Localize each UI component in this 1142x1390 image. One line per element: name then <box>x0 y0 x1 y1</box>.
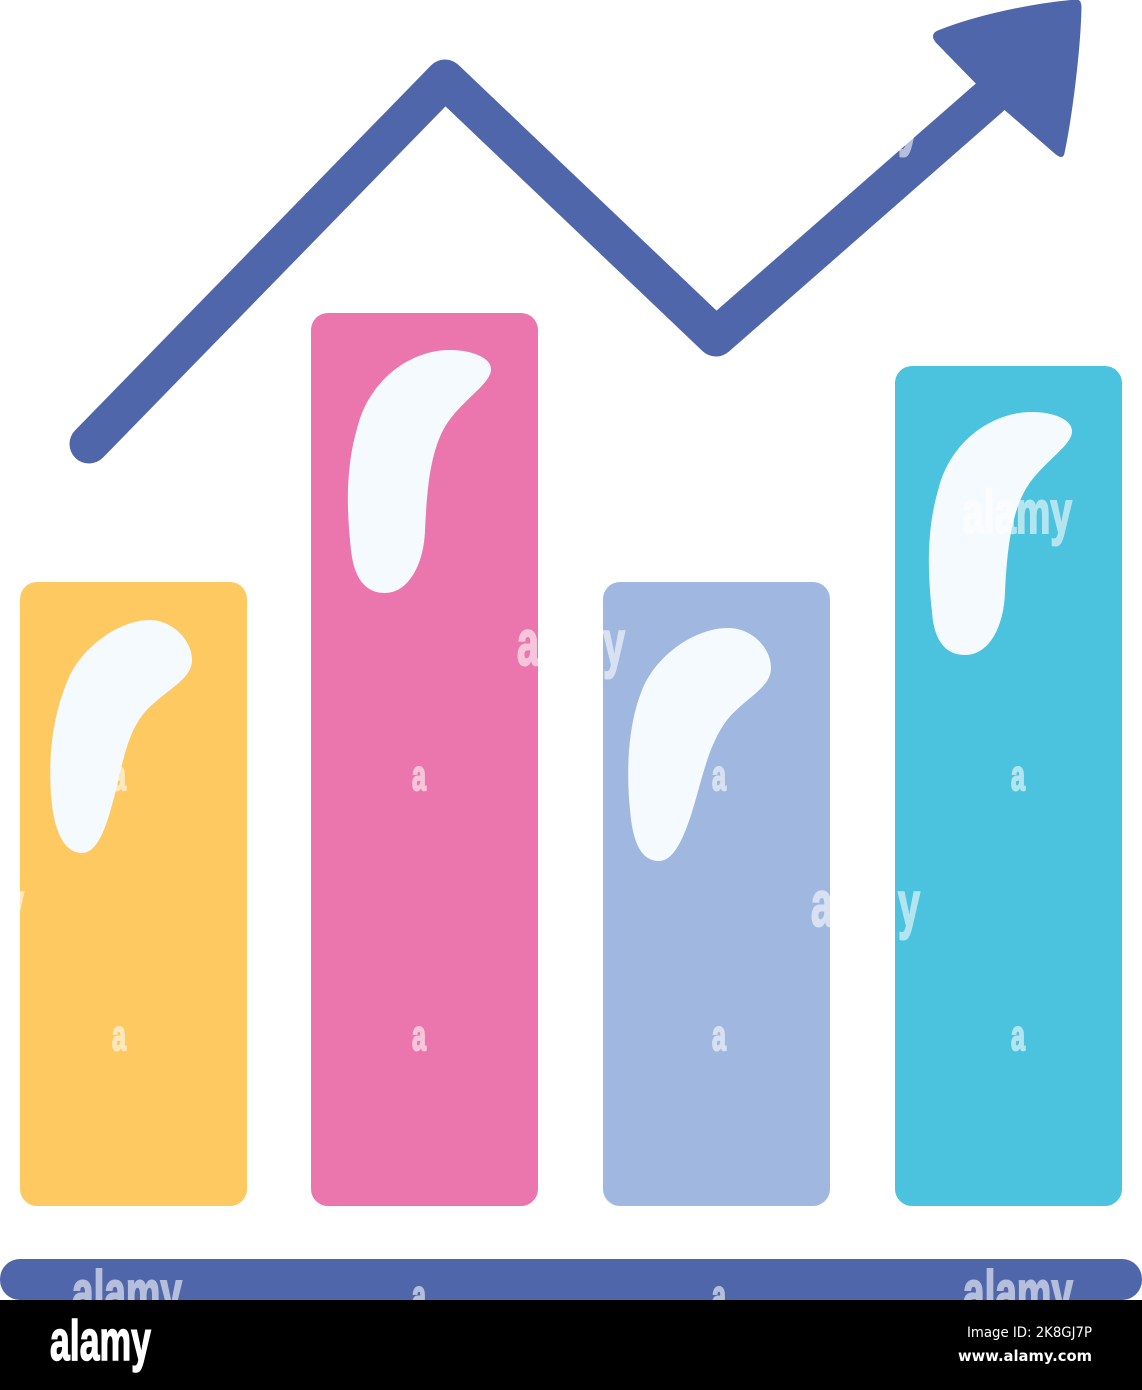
trend arrow: y <box>898 85 920 157</box>
baseline <box>0 1259 1142 1326</box>
bar 2: pink: a <box>412 752 427 800</box>
bar 3: light blue <box>603 582 833 1206</box>
bar 1: yellow: a <box>112 752 127 800</box>
bar 2: pink: a <box>412 1012 427 1060</box>
bar 2: pink: a <box>517 607 539 679</box>
bar 3: light blue: a <box>712 752 727 800</box>
bar 4: teal: alamy <box>962 479 1072 546</box>
bar 4: teal: a <box>1011 752 1026 800</box>
image id: Image ID: 2K8GJ7P <box>967 1325 1092 1341</box>
bar 3: light blue: a <box>811 868 833 940</box>
baseline: alamy <box>963 1259 1073 1326</box>
bar 4: teal <box>895 366 1122 1206</box>
baseline: a <box>412 1272 427 1320</box>
bar 1: yellow: y <box>2 868 24 940</box>
bar 4: teal: y <box>898 868 920 940</box>
trend arrow <box>89 0 1081 444</box>
footer bar <box>0 1300 1142 1390</box>
bar 1: yellow <box>2 582 247 1206</box>
bar 4: teal: a <box>1011 1012 1026 1060</box>
bar 2: pink <box>311 313 539 1206</box>
baseline: alamy <box>72 1259 182 1326</box>
bar 3: light blue: a <box>712 1012 727 1060</box>
baseline: a <box>712 1272 727 1320</box>
bar 1: yellow: a <box>112 1012 127 1060</box>
website: www.alamy.com <box>958 1347 1092 1365</box>
footer logo: alamy <box>50 1309 151 1373</box>
bar 3: light blue: y <box>603 607 625 679</box>
